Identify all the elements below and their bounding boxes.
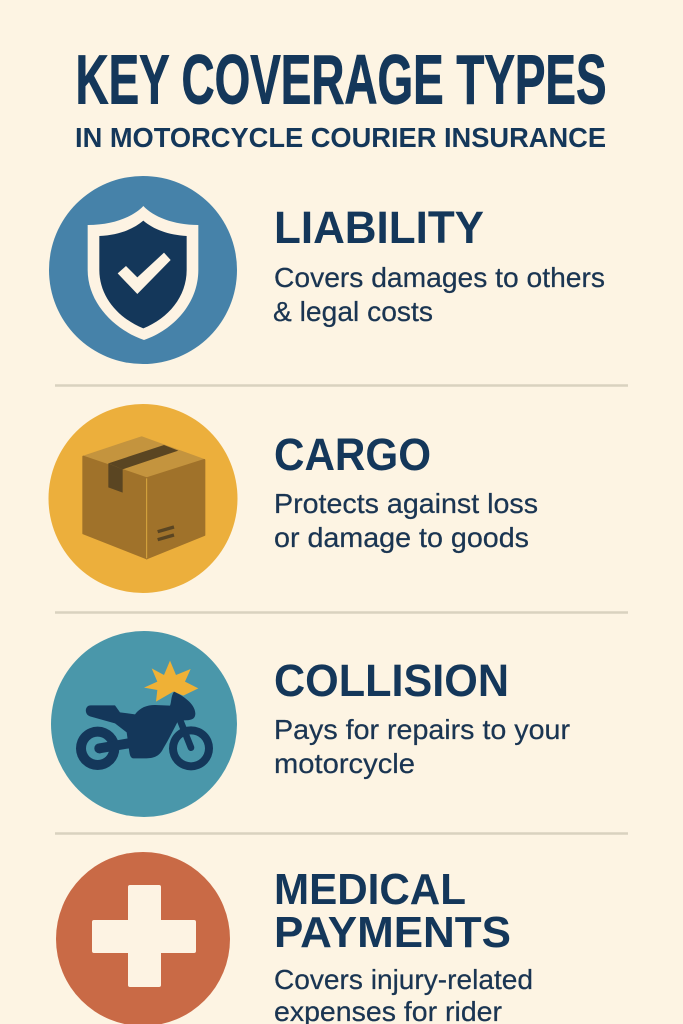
panel: cargo xyxy=(48,404,538,593)
icon: cardboard box xyxy=(48,404,238,593)
description: liability xyxy=(273,262,605,327)
panel: liability xyxy=(49,176,605,364)
heading: medical payments: MEDICAL xyxy=(274,865,466,914)
description: cargo: or damage to goods xyxy=(274,522,529,553)
heading: medical payments: PAYMENTS xyxy=(274,908,511,957)
icon: shield with check xyxy=(49,176,237,364)
icon: medical cross xyxy=(56,852,230,1024)
description: liability: Covers damages to others xyxy=(274,262,605,293)
panel: medical payments xyxy=(56,852,533,1024)
heading: medical payments xyxy=(274,865,511,957)
icon: motorcycle with impact star xyxy=(51,631,237,817)
description: cargo: Protects against loss xyxy=(274,488,538,519)
description: collision xyxy=(274,714,570,779)
heading: cargo: CARGO xyxy=(274,429,431,480)
description: collision: Pays for repairs to your xyxy=(274,714,570,745)
description: cargo xyxy=(274,488,538,553)
heading: collision: COLLISION xyxy=(274,655,509,706)
heading: liability: LIABILITY xyxy=(274,202,484,253)
description: collision: motorcycle xyxy=(274,748,415,779)
description: medical payments: Covers injury-related xyxy=(274,964,533,995)
description: liability: & legal costs xyxy=(273,296,433,327)
subtitle: IN MOTORCYCLE COURIER INSURANCE xyxy=(75,122,606,153)
panel: collision xyxy=(51,631,570,817)
title block xyxy=(75,40,606,153)
description: medical payments xyxy=(274,964,533,1024)
